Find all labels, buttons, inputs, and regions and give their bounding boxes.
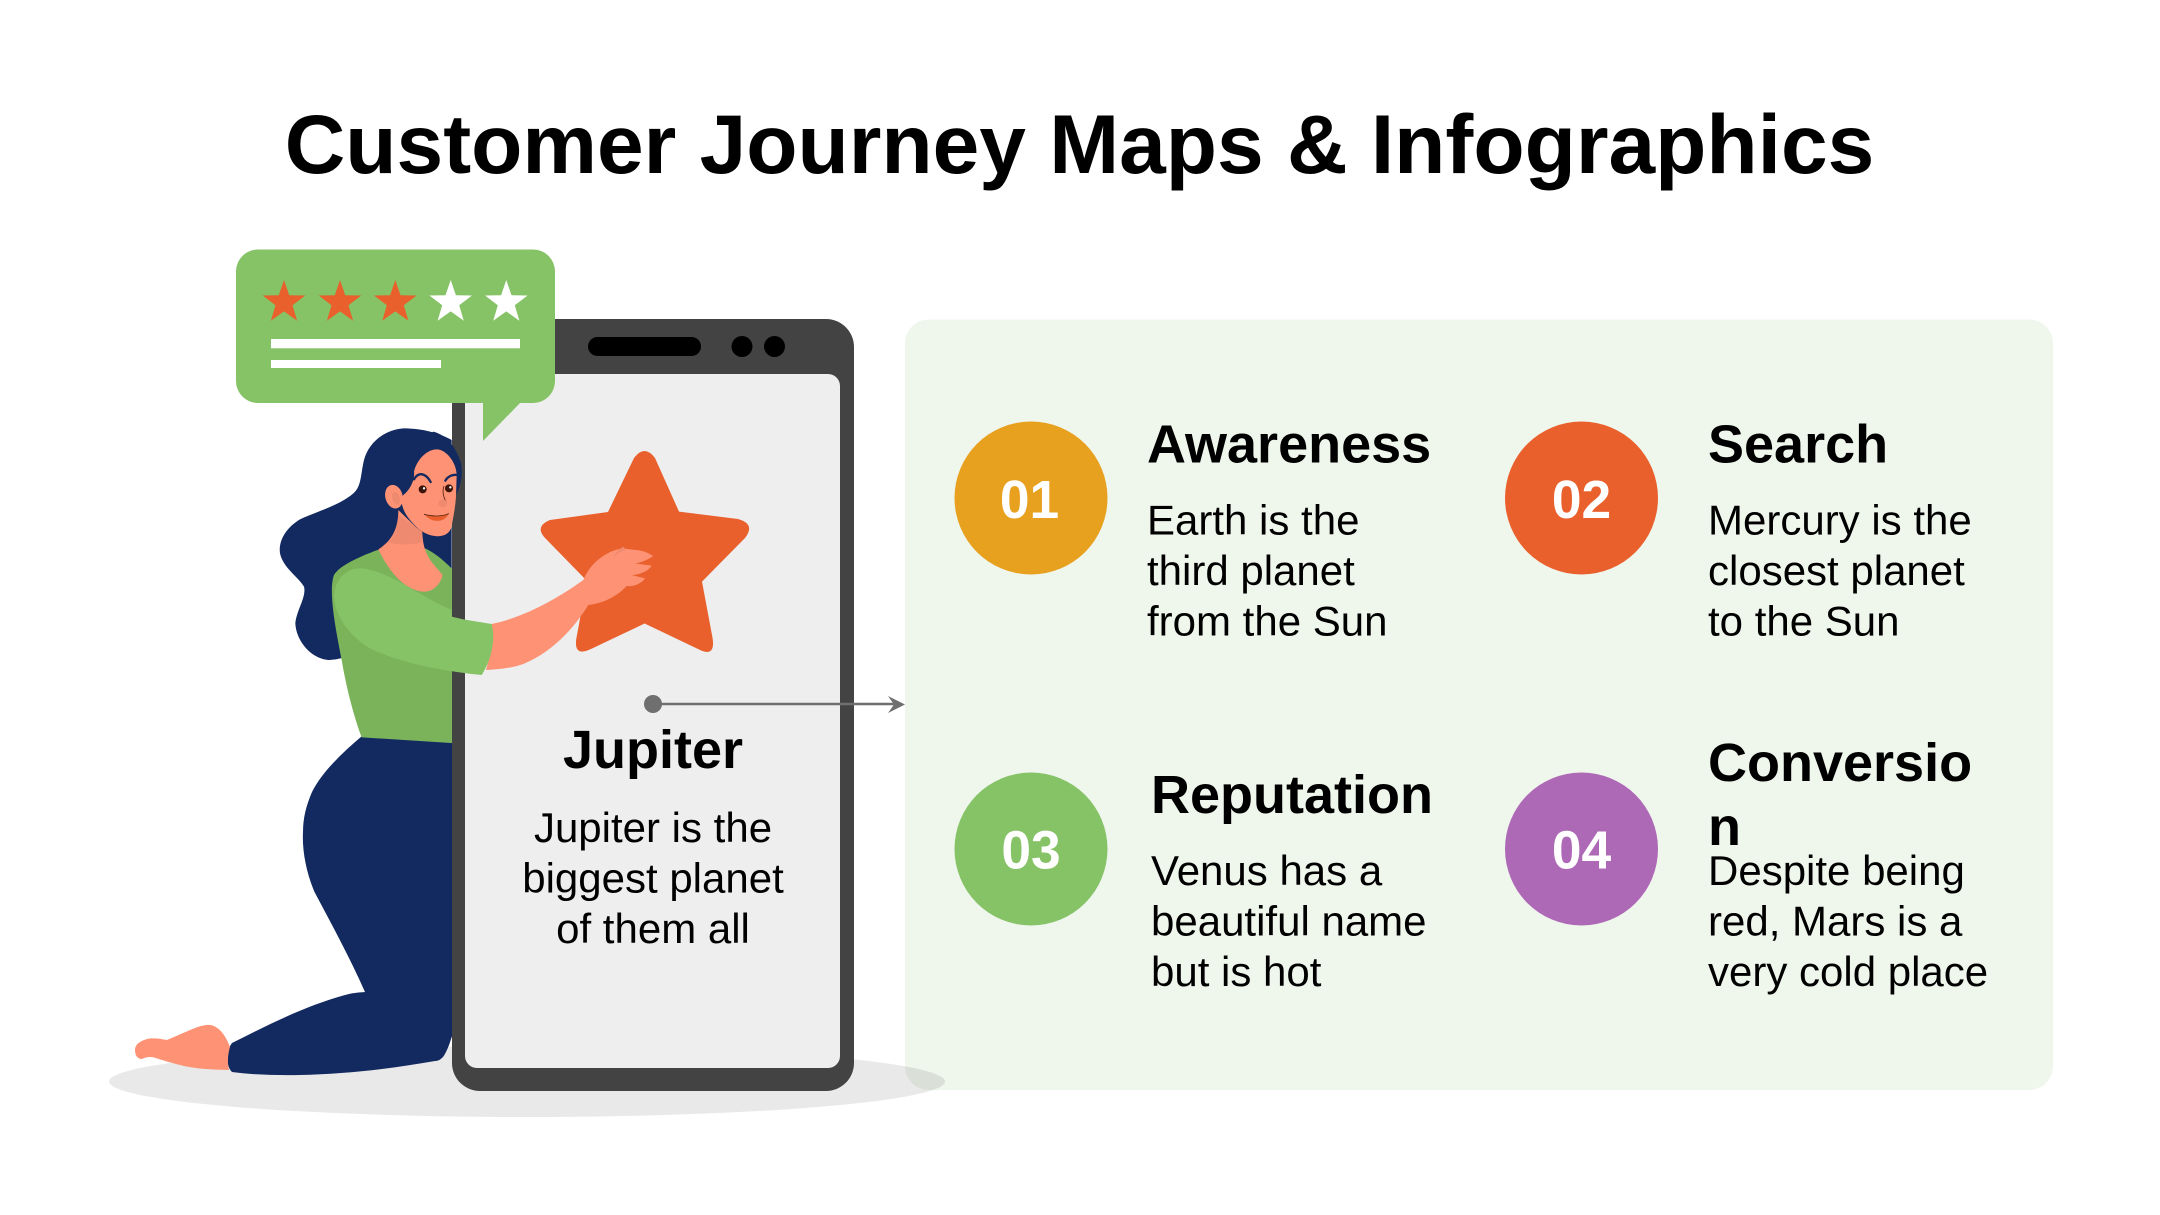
description: third planet <box>1147 547 1355 594</box>
neck <box>378 510 443 592</box>
heading Reputation: Reputation <box>1151 765 1433 825</box>
description: but is hot <box>1151 948 1322 995</box>
description: red, Mars is a <box>1708 898 1963 944</box>
heading Conversion (wrapped): n <box>1708 797 1741 857</box>
bubble shape <box>236 250 555 441</box>
stage 02: Search <box>1505 414 1983 644</box>
Jupiter heading: Jupiter <box>563 720 743 780</box>
arrow: Jupiter to stages <box>644 695 905 713</box>
stage 03: Reputation <box>954 765 1438 995</box>
phone <box>452 319 854 1091</box>
facial features <box>414 474 457 521</box>
badge 02: 02 <box>1552 471 1611 530</box>
phone body <box>452 319 854 1091</box>
Jupiter description: biggest planet <box>522 854 784 902</box>
foot <box>135 1025 230 1070</box>
arm and hand <box>486 547 653 670</box>
rating stars <box>263 280 528 321</box>
description: from the Sun <box>1147 598 1387 644</box>
description: Mercury is the <box>1708 496 1972 544</box>
badge 02 <box>1505 422 1658 574</box>
ear <box>383 483 405 510</box>
ground shadow <box>109 1046 945 1117</box>
stage 04: Conversion <box>1505 733 1988 995</box>
description: to the Sun <box>1708 598 1899 644</box>
phone screen <box>465 374 840 1068</box>
description: closest planet <box>1708 547 1965 594</box>
illustration: woman body behind phone <box>135 428 460 1075</box>
phone camera dots <box>732 336 785 357</box>
Jupiter description: of them all <box>556 905 750 952</box>
title: Customer Journey Maps & Infographics <box>285 97 1874 191</box>
illustration: woman head and arm over phone <box>334 432 653 675</box>
phone text: Jupiter <box>522 720 784 952</box>
description: very cold place <box>1708 948 1988 995</box>
shirt <box>332 548 457 743</box>
icon: big star <box>541 451 749 652</box>
phone speaker <box>588 337 701 356</box>
description: Despite being <box>1708 847 1965 894</box>
hair back <box>280 428 452 660</box>
badge 04: 04 <box>1552 822 1611 880</box>
heading Awareness: Awareness <box>1147 414 1431 474</box>
Jupiter description <box>522 804 784 952</box>
panel: journey stages background <box>905 320 2053 1090</box>
sleeve <box>334 568 493 675</box>
heading Conversion (wrapped): Conversio <box>1708 733 1972 793</box>
pants <box>228 736 460 1075</box>
review lines <box>271 339 520 368</box>
stage 01: Awareness <box>954 414 1431 644</box>
badge 03 <box>954 772 1108 926</box>
description: Venus has a <box>1151 847 1383 894</box>
hair over phone edge <box>403 432 462 500</box>
description: beautiful name <box>1151 898 1427 944</box>
badge 04 <box>1505 772 1658 926</box>
speech bubble with rating <box>236 250 555 441</box>
description: Earth is the <box>1147 496 1359 544</box>
badge 03: 03 <box>1001 822 1061 880</box>
face <box>402 449 457 536</box>
badge 01 <box>954 422 1108 574</box>
neck shadow <box>388 515 422 544</box>
badge 01: 01 <box>1000 471 1059 530</box>
Jupiter description: Jupiter is the <box>534 804 772 851</box>
heading Search: Search <box>1708 414 1888 474</box>
